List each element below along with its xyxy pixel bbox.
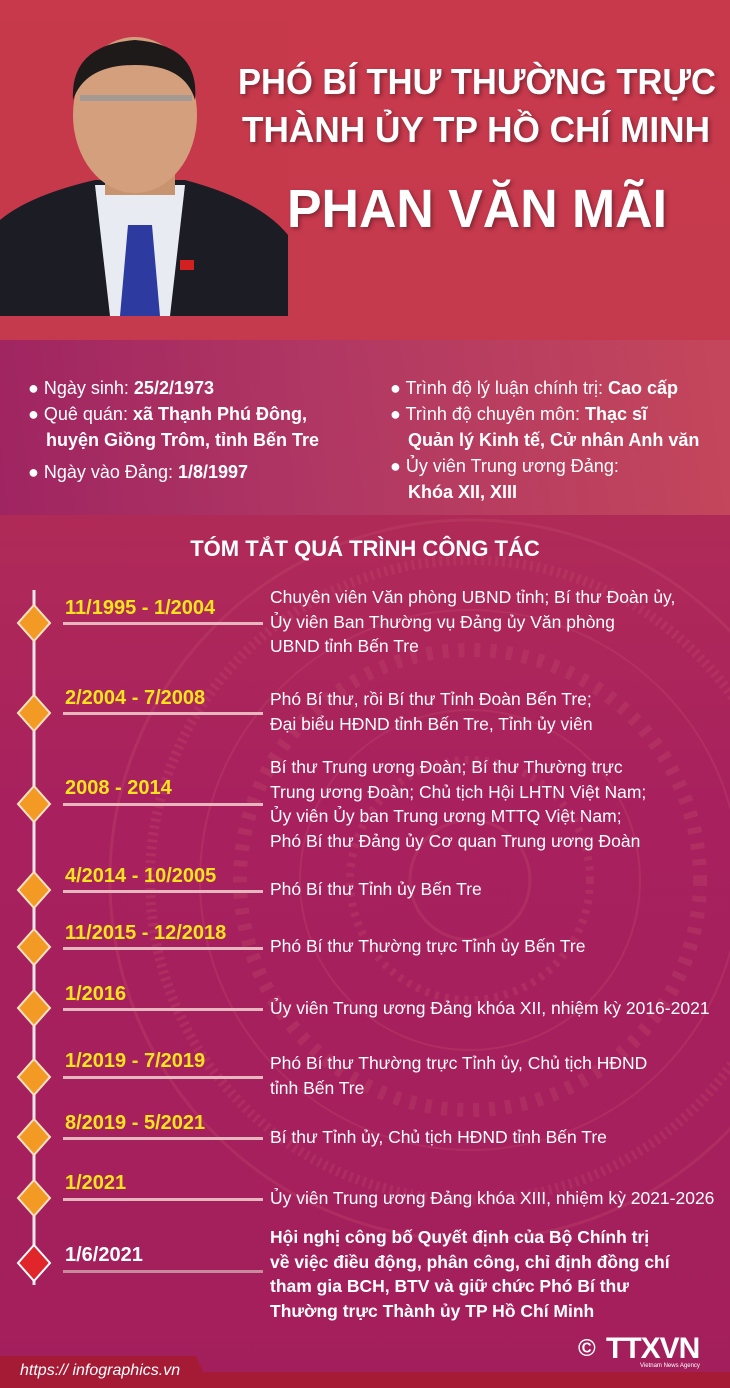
- timeline entry 5: 11/2015 - 12/2018: [65, 922, 226, 944]
- title: PHÓ BÍ THƯ THƯỜNG TRỰC: [238, 60, 716, 102]
- portrait photo: [0, 37, 288, 316]
- timeline entry 10: Hội nghị công bố Quyết định của Bộ Chính trị: [270, 1227, 649, 1247]
- info: right column: Quản lý Kinh tế, Cử nhân Anh văn: [408, 430, 699, 450]
- footer bar: [0, 1372, 730, 1388]
- logo TTXVN: ©: [578, 1335, 596, 1362]
- timeline entry 6: [63, 983, 710, 1018]
- timeline entry 7: tỉnh Bến Tre: [270, 1078, 364, 1098]
- logo TTXVN: [578, 1332, 700, 1369]
- section heading: TÓM TẮT QUÁ TRÌNH CÔNG TÁC: [190, 536, 540, 561]
- timeline entry 7: 1/2019 - 7/2019: [65, 1050, 205, 1072]
- timeline entry 7: [63, 1050, 647, 1098]
- info: left column: ● Quê quán: xã Thạnh Phú Đông,: [28, 404, 307, 424]
- timeline entry 3: [63, 757, 646, 850]
- footer url tab: [0, 1356, 203, 1378]
- info: left column: ● Ngày sinh: 25/2/1973: [28, 378, 214, 398]
- footer url tab: https:// infographics.vn: [20, 1362, 180, 1379]
- info: left column: huyện Giồng Trôm, tỉnh Bến Tre: [46, 430, 319, 450]
- info: left column: [28, 378, 319, 482]
- timeline entry 9: 1/2021: [65, 1172, 126, 1194]
- timeline entry 3: Trung ương Đoàn; Chủ tịch Hội LHTN Việt Nam;: [270, 782, 646, 802]
- timeline entry 3: Ủy viên Ủy ban Trung ương MTTQ Việt Nam;: [270, 806, 622, 826]
- timeline entry 8: Bí thư Tỉnh ủy, Chủ tịch HĐND tỉnh Bến Tre: [270, 1127, 607, 1147]
- timeline entry 6: 1/2016: [65, 983, 126, 1005]
- timeline entry 3: Phó Bí thư Đảng ủy Cơ quan Trung ương Đoàn: [270, 830, 640, 850]
- timeline entry 4: Phó Bí thư Tỉnh ủy Bến Tre: [270, 879, 482, 899]
- timeline entry 3: 2008 - 2014: [65, 777, 172, 799]
- timeline entry 8: [63, 1112, 607, 1147]
- timeline entry 9: Ủy viên Trung ương Đảng khóa XIII, nhiệm kỳ 2021-2026: [270, 1188, 714, 1208]
- timeline entry 10: 1/6/2021: [65, 1244, 143, 1266]
- timeline entry 10: Thường trực Thành ủy TP Hồ Chí Minh: [270, 1300, 594, 1320]
- info: right column: ● Trình độ lý luận chính trị: Cao cấp: [390, 378, 678, 398]
- title: THÀNH ỦY TP HỒ CHÍ MINH: [242, 108, 710, 150]
- timeline entry 4: 4/2014 - 10/2005: [65, 865, 216, 887]
- info: right column: [390, 378, 699, 502]
- timeline entry 2: [63, 687, 593, 734]
- logo TTXVN: TTXVN: [606, 1332, 699, 1365]
- timeline entry 10: tham gia BCH, BTV và giữ chức Phó Bí thư: [270, 1276, 629, 1296]
- timeline entry 1: Chuyên viên Văn phòng UBND tỉnh; Bí thư Đoàn ủy,: [270, 587, 675, 607]
- timeline entry 1: [63, 587, 675, 656]
- title: [238, 60, 718, 239]
- title: PHAN VĂN MÃI: [287, 179, 667, 239]
- timeline entry 10: [63, 1227, 670, 1320]
- timeline entry 1: UBND tỉnh Bến Tre: [270, 636, 419, 656]
- timeline entry 2: 2/2004 - 7/2008: [65, 687, 205, 709]
- timeline entry 8: 8/2019 - 5/2021: [65, 1112, 205, 1134]
- background drum pattern: [108, 518, 730, 1242]
- info: right column: ● Ủy viên Trung ương Đảng:: [390, 456, 619, 476]
- timeline entry 2: Đại biểu HĐND tỉnh Bến Tre, Tỉnh ủy viên: [270, 714, 593, 734]
- timeline entry 10: về việc điều động, phân công, chỉ định đồng chí: [270, 1252, 670, 1272]
- info: right column: ● Trình độ chuyên môn: Thạc sĩ: [390, 404, 647, 424]
- timeline entry 6: Ủy viên Trung ương Đảng khóa XII, nhiệm kỳ 2016-2021: [270, 998, 710, 1018]
- timeline entry 3: Bí thư Trung ương Đoàn; Bí thư Thường trực: [270, 757, 623, 777]
- info panel band: [0, 340, 730, 515]
- logo TTXVN: Vietnam News Agency: [640, 1363, 700, 1369]
- info: left column: ● Ngày vào Đảng: 1/8/1997: [28, 462, 248, 482]
- timeline entry 4: [63, 865, 482, 899]
- info: right column: Khóa XII, XIII: [408, 482, 517, 502]
- timeline entry 1: 11/1995 - 1/2004: [65, 597, 215, 619]
- timeline entry 2: Phó Bí thư, rồi Bí thư Tỉnh Đoàn Bến Tre;: [270, 689, 592, 709]
- timeline entry 9: [63, 1172, 714, 1208]
- timeline entry 5: [63, 922, 585, 956]
- timeline entry 7: Phó Bí thư Thường trực Tỉnh ủy, Chủ tịch HĐND: [270, 1053, 647, 1073]
- timeline entry 5: Phó Bí thư Thường trực Tỉnh ủy Bến Tre: [270, 936, 585, 956]
- timeline entry 1: Ủy viên Ban Thường vụ Đảng ủy Văn phòng: [270, 612, 615, 632]
- timeline line and diamonds: [16, 590, 52, 1285]
